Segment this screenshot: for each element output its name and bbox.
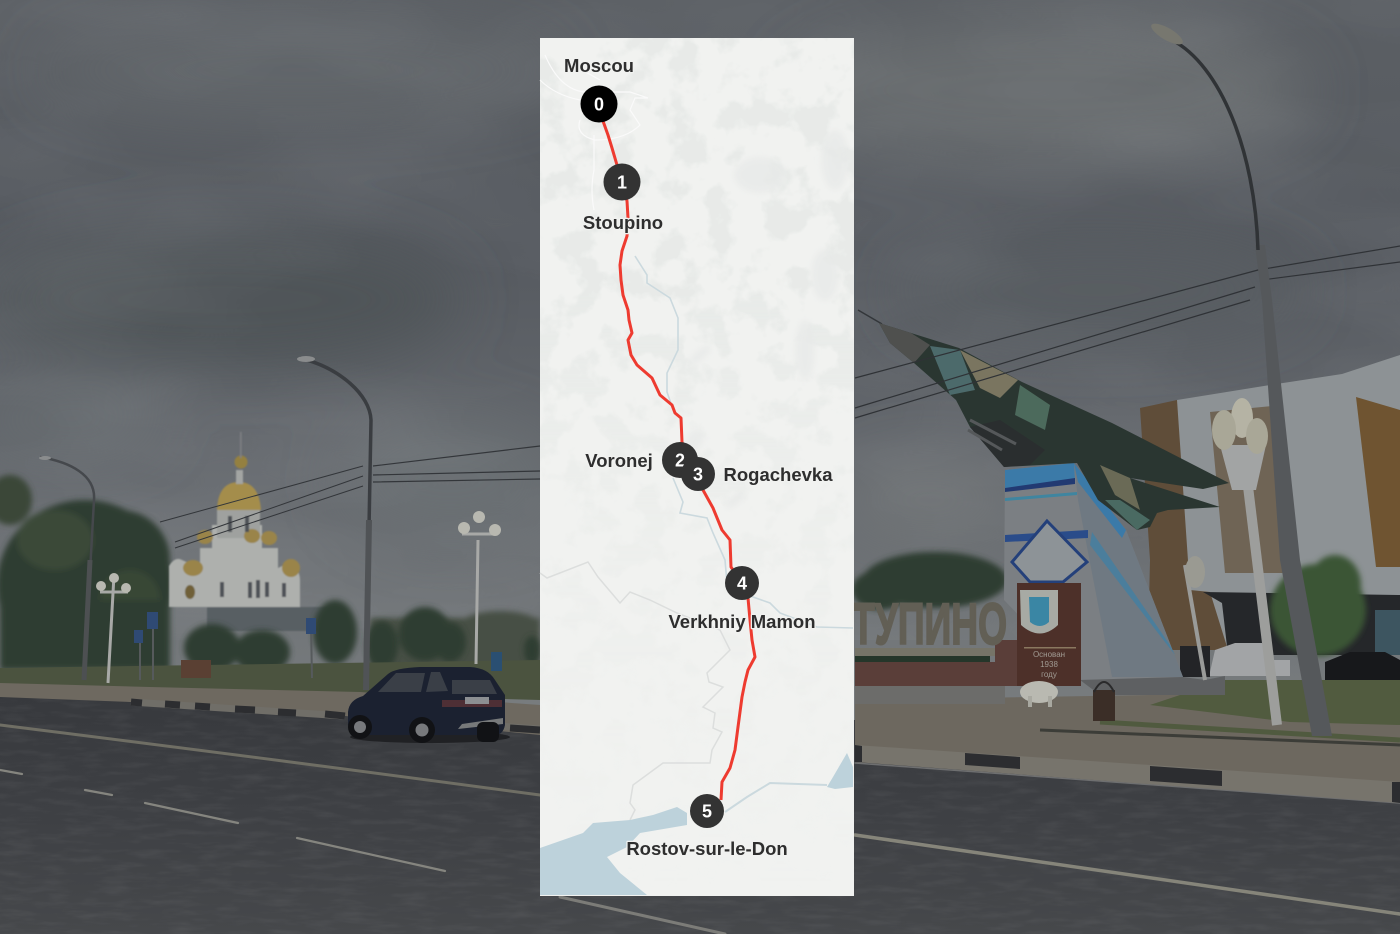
right curb (855, 745, 1400, 803)
road (0, 697, 1400, 934)
tree and cars at right (1180, 555, 1400, 680)
left trees (0, 475, 173, 670)
right wires (855, 246, 1400, 418)
plaque with coat of arms: 1938 (1040, 660, 1058, 669)
marker 5 (690, 794, 724, 828)
sea of Azov (540, 807, 687, 895)
marker 2: 2 (675, 450, 685, 470)
monument pedestal (1004, 463, 1225, 695)
plaque with coat of arms: году (1041, 670, 1057, 679)
terrain texture (540, 38, 854, 896)
left poles, lamps and wires (39, 356, 540, 690)
marker 5: 5 (702, 802, 712, 822)
left curb (131, 702, 540, 730)
white dog (1020, 681, 1058, 707)
stone city sign (852, 592, 1017, 704)
map background (540, 38, 854, 896)
Moscow road network (540, 55, 648, 210)
large street light (1148, 20, 1332, 736)
label: Verkhniy Mamon: Verkhniy Mamon (668, 611, 816, 632)
label: Voronej: Voronej (585, 450, 653, 471)
marker 1 (604, 164, 640, 200)
plaque with coat of arms: Основан (1033, 650, 1065, 659)
marker 0 (580, 86, 618, 122)
river Don upper and middle (635, 256, 853, 628)
right trees behind sign (852, 552, 1007, 610)
left sidewalk (0, 683, 540, 738)
stone city sign: ТУПИНО (852, 592, 1007, 657)
label: Rogachevka: Rogachevka (724, 464, 833, 485)
building (1140, 355, 1400, 655)
right lawn and sidewalk (855, 680, 1400, 790)
marker 2 (662, 442, 698, 478)
ornate lamp post (1185, 398, 1277, 725)
marker 0: 0 (594, 94, 604, 114)
label: Stoupino: Stoupino (583, 212, 663, 233)
river Don lower and reservoir (725, 753, 853, 812)
marker 4: 4 (737, 574, 747, 594)
distant tree line (370, 611, 540, 668)
plaque with coat of arms (1017, 583, 1081, 686)
sky with clouds (0, 0, 1400, 720)
label: Moscou: Moscou (564, 55, 634, 76)
label: Rostov-sur-le-Don: Rostov-sur-le-Don (626, 838, 788, 859)
marker 3 (681, 457, 715, 491)
road markings (0, 725, 1400, 934)
fighter jet on monument (858, 310, 1229, 530)
marker 1: 1 (617, 172, 627, 192)
marker 3: 3 (693, 464, 703, 484)
route line (603, 121, 755, 800)
church (169, 432, 327, 631)
car (348, 667, 510, 743)
panel: route map (540, 38, 854, 896)
marker 4 (725, 566, 759, 600)
left mid trees and grass (0, 600, 540, 700)
litter bin (1093, 682, 1115, 721)
border line (540, 562, 730, 820)
